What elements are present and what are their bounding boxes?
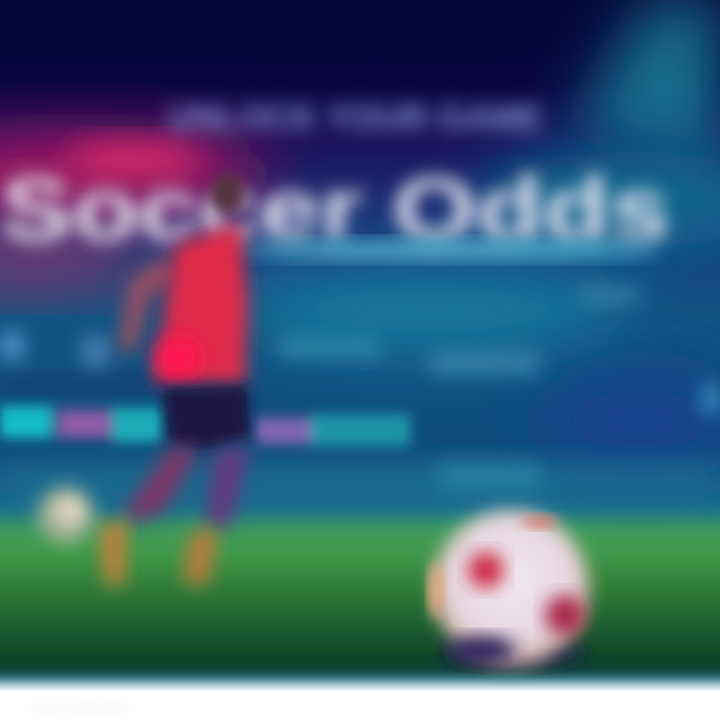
title: Soccer Odds [0,160,670,260]
footer text: Soccer odds guide [30,701,130,715]
shorts [162,385,250,450]
main soccer ball [429,510,589,666]
small right labels [440,385,720,490]
right leg [205,445,250,530]
left info labels [0,285,640,376]
head [210,173,244,213]
small background ball [38,487,94,543]
shirt [155,222,248,385]
highlight band [0,406,410,446]
footer white strip [0,683,720,720]
player [98,173,250,585]
arm [118,255,175,352]
shirt highlight [154,336,202,380]
subtitle: UNLOCK YOUR GAME [168,97,542,138]
pitch [0,518,720,676]
left leg [125,445,200,525]
title glow underline [240,240,660,260]
boots [98,520,128,585]
